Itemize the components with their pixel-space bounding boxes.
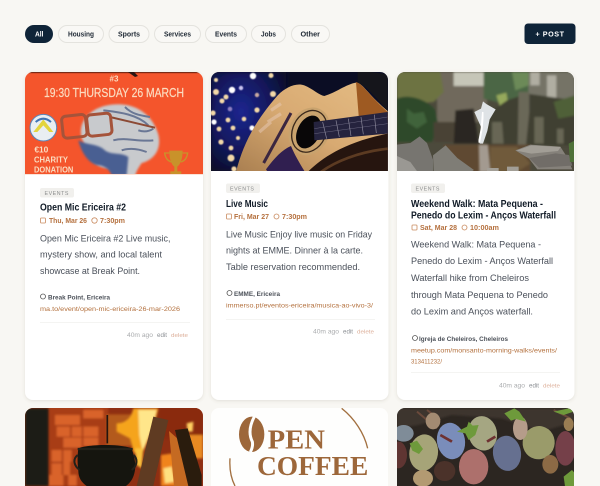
post meta: edit (529, 384, 539, 390)
pill: Other: Other (300, 30, 320, 38)
pill: Sports (109, 26, 149, 42)
pill: All (active) (25, 25, 53, 43)
date and time (412, 223, 499, 232)
pill: Housing: Housing (68, 30, 94, 38)
card title: Open Mic Ericeira #2 (40, 202, 126, 214)
category tag: EVENTS (416, 186, 440, 192)
image: charity event poster: €10 (34, 145, 49, 155)
post meta: delete (171, 333, 188, 339)
pill: Jobs (252, 26, 286, 42)
logo wordmark: COFFEE (257, 451, 368, 481)
category tag: EVENTS (44, 191, 69, 197)
panel: Open Mic Ericeira card (25, 72, 203, 400)
description: Live Music Enjoy live music on Friday (226, 228, 372, 240)
panel: Weekend Walk card (397, 72, 575, 400)
date and time (40, 216, 125, 225)
link: 313411232/ (411, 358, 442, 366)
date and time: 7:30pm (282, 212, 307, 221)
card title: Penedo do Lexim - Anços Waterfall (411, 210, 556, 222)
image: charity event poster: CHARITY (34, 155, 68, 165)
image: charity event poster: DONATION (34, 164, 73, 174)
logo wordmark (258, 430, 367, 476)
panel: Live Music card (210, 72, 389, 400)
icon: coffee bean letter O (239, 417, 264, 452)
pill: Services: Services (164, 30, 191, 38)
pill: Jobs: Jobs (261, 30, 276, 38)
post meta: edit (157, 333, 167, 339)
pill: Sports: Sports (118, 30, 140, 38)
description: mystery show, and local talent (40, 248, 162, 260)
date and time: Fri, Mar 27 (234, 212, 269, 221)
location: EMME, Ericeira (234, 291, 280, 298)
post meta: 40m ago (499, 384, 526, 390)
date and time: Thu, Mar 26 (49, 216, 87, 225)
card title: Live Music (226, 199, 268, 210)
link: meetup.com/monsanto-morning-walks/events/ (411, 348, 557, 354)
date and time: 10:00am (470, 223, 499, 232)
date and time: Sat, Mar 28 (420, 223, 457, 232)
category tag (411, 184, 445, 193)
card title (411, 199, 556, 222)
description (226, 228, 372, 272)
pill: All (active): All (35, 30, 44, 38)
panel: open coffee card image (211, 405, 389, 486)
link: immerso.pt/eventos-ericeira/musica-ao-vivo-3/ (226, 302, 373, 310)
post button (524, 24, 576, 44)
link (411, 348, 557, 366)
panel: painted eggs card image (390, 405, 575, 486)
category tag (40, 188, 74, 198)
description: do Lexim and Anços waterfall. (411, 306, 533, 316)
category tag (226, 184, 260, 193)
category tag: EVENTS (230, 186, 254, 192)
pill: Events (206, 26, 246, 42)
location: Break Point, Ericeira (48, 294, 110, 302)
date and time (226, 212, 307, 221)
description: Waterfall hike from Cheleiros (411, 272, 529, 283)
description: Open Mic Ericeira #2 Live music, (40, 232, 170, 244)
post meta (499, 384, 560, 390)
card title: Weekend Walk: Mata Pequena - (411, 199, 543, 210)
post button: + POST (536, 30, 565, 38)
image: acoustic guitar (210, 72, 389, 178)
post meta: delete (543, 384, 560, 390)
pill: Housing (58, 26, 104, 42)
description: showcase at Break Point. (40, 265, 140, 276)
link: ma.to/event/open-mic-ericeira-26-mar-2026 (40, 306, 180, 313)
pill: Other (292, 26, 330, 42)
description: Penedo do Lexim - Anços Waterfall (411, 255, 553, 266)
post meta (313, 330, 374, 336)
post meta: delete (357, 330, 374, 336)
description: Table reservation recommended. (226, 261, 360, 272)
description (411, 238, 553, 316)
post meta: 40m ago (127, 333, 154, 339)
date and time: 7:30pm (100, 216, 125, 225)
image: charity event poster: #3 (110, 74, 119, 84)
pill: Services (154, 26, 200, 42)
post meta: edit (343, 330, 353, 336)
post meta (127, 333, 188, 339)
description: nights at EMME. Dinner à la carte. (226, 244, 363, 256)
image: charity event poster: 19:30 THURSDAY 26 MARCH (44, 85, 184, 100)
description (40, 232, 170, 276)
post meta: 40m ago (313, 330, 340, 336)
location: Igreja de Cheleiros, Cheleiros (419, 336, 508, 343)
logo wordmark: PEN (268, 424, 325, 454)
image: waterfall (397, 72, 575, 172)
category filter pills (25, 25, 330, 43)
pill: Events: Events (215, 30, 237, 38)
description: Weekend Walk: Mata Pequena - (411, 238, 541, 250)
panel: fireplace card image (25, 405, 203, 486)
description: through Mata Pequena to Penedo (411, 289, 548, 300)
image: charity event poster (25, 72, 203, 178)
